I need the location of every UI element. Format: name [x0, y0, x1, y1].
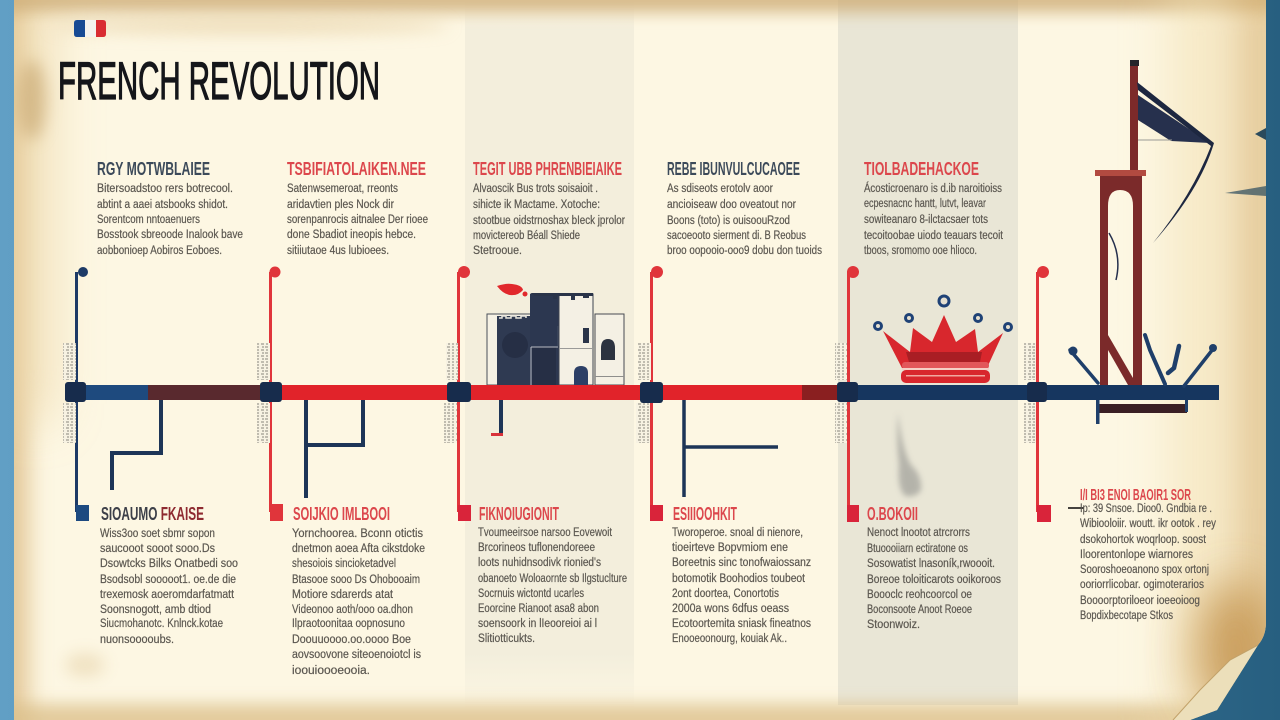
text block: column 3 bottom: [478, 504, 627, 645]
body text: aridavtien ples Nock dir: [287, 199, 394, 211]
body text: Alvaoscik Bus trots soisaioit .: [473, 183, 598, 195]
text block: column 6 bottom: [1068, 487, 1216, 622]
body text: Bopdixbecotape Stkos: [1080, 610, 1173, 622]
frame: [1100, 176, 1142, 385]
body text: abtint a aaei atsbooks shidot.: [97, 199, 228, 211]
right block: [595, 314, 624, 385]
marker 3: [457, 266, 471, 521]
body text: aovsoovone siteoenoiotcl is: [292, 649, 421, 661]
body text: [864, 182, 1004, 257]
body text: tioeirteve Bopvmiom ene: [672, 542, 788, 554]
body text: 2000a wons 6dfus oeass: [672, 603, 789, 615]
tick ladders around nodes: [63, 343, 1036, 443]
panel: shaded column 5: [838, 0, 1018, 705]
marker 2: [269, 266, 283, 521]
text block: column 2 bottom: [292, 504, 425, 677]
heading: REBE IBUNVULCUCAOEE: [667, 159, 800, 179]
body text: Enooeoonourg, kouiak Ak..: [672, 633, 787, 645]
connector 3: [499, 400, 503, 435]
illustration: Bastille fortress: [487, 284, 624, 385]
faint ink smear: [897, 412, 921, 496]
body text: movictereob Béall Shiede: [473, 230, 580, 242]
blade flag: [1137, 82, 1214, 243]
text block: column 4 top: [667, 159, 822, 257]
marker 6: [1036, 266, 1051, 522]
body text: Dsowtcks Bilks Onatbedi soo: [100, 558, 238, 570]
body text: Sooroshoeoanono spox ortonj: [1080, 564, 1209, 576]
body text: [100, 528, 238, 646]
crown spikes: [883, 315, 1003, 370]
heading: TEGIT UBB PHRENBIEIAIKE: [473, 159, 622, 179]
diagonal brace: [1108, 335, 1133, 385]
body text: Nenoct lnootot atrcrorrs: [867, 527, 970, 539]
body text: ecpesnacnc hantt, lutvt, leavar: [864, 198, 986, 210]
lower base: [1096, 400, 1188, 424]
body text: Doouuoooo.oo.oooo Boe: [292, 634, 411, 646]
text block: column 5 bottom: [867, 504, 1001, 631]
body text: [672, 527, 811, 645]
main timeline bar: [65, 382, 1219, 403]
body text: [292, 528, 425, 677]
body text: Soonsnogott, amb dtiod: [100, 604, 211, 616]
connector 2: [306, 400, 363, 498]
marker 4: [650, 266, 663, 521]
body text: Sorentcom nntoaenuers: [97, 214, 200, 226]
body text: botomotik Boohodios toubeot: [672, 573, 806, 585]
body text: sihicte ik Mactame. Xotoche:: [473, 199, 600, 211]
illustration: crown: [874, 296, 1012, 383]
connector 1: [112, 400, 161, 490]
body text: Boooorptoriloeor ioeeoioog: [1080, 595, 1200, 607]
text block: column 2 top: [287, 159, 428, 257]
body text: sorenpanrocis aitnalee Der rioee: [287, 214, 428, 226]
body text: Ácosticroenaro is d.ib naroitioiss: [864, 182, 1002, 195]
body text: Bitersoadstoo rers botrecool.: [97, 183, 233, 195]
body text: Iloorentonlope wiarnores: [1080, 549, 1193, 561]
heading: O.BOKOII: [867, 504, 918, 524]
body text: [478, 527, 627, 645]
body text: ancioiseaw doo oveatout nor: [667, 199, 796, 211]
vertical markers and end squares: [75, 266, 1051, 522]
body text: Boooclc reohcoorcol oe: [867, 589, 972, 601]
body text: done Sbadiot ineopis hebce.: [287, 229, 416, 241]
connector 3 red foot: [491, 433, 503, 436]
upright post: [1130, 60, 1138, 172]
body text: nuonsooooubs.: [100, 634, 174, 646]
body text: Stetrooue.: [473, 245, 522, 257]
smoke: [497, 284, 523, 295]
body text: loots nuhidnsodivk rionied's: [478, 557, 601, 569]
body text: Tworoperoe. snoal di nienore,: [672, 527, 803, 539]
body text: sacoeooto sierment di. B Reobus: [667, 230, 806, 242]
body text: [473, 183, 625, 257]
body text: aobbonioep Aobiros Eoboes.: [97, 245, 222, 257]
central dark tower: [530, 294, 567, 385]
body text: Btasooe sooo Ds Ohobooaim: [292, 574, 420, 586]
body text: ioouioooeooia.: [292, 665, 370, 677]
body text: [667, 183, 822, 257]
body text: As sdiseots erotolv aoor: [667, 183, 773, 195]
text block: column 5 top: [864, 159, 1004, 257]
body text: obanoeto Woloaornte sb Ilgstuclture: [478, 573, 627, 585]
body text: [287, 183, 428, 257]
body text: Siucmohanotc. Knlnck.kotae: [100, 618, 223, 630]
body text: saucooot sooot sooo.Ds: [100, 543, 215, 555]
body text: dnetmon aoea Afta cikstdoke: [292, 543, 425, 555]
heading: TSBIFIATOLAIKEN.NEE: [287, 159, 426, 179]
body text: stootbue oidstrnoshax bIeck jprolor: [473, 215, 625, 227]
body text: [1080, 503, 1216, 622]
body text: tboos, sromomo ooe hlioco.: [864, 245, 977, 257]
body text: Satenwsemeroat, rreonts: [287, 183, 398, 195]
body text: Yornchoorea. Bconn otictis: [292, 528, 423, 540]
body text: Wibiooloiir. woutt. ikr ootok . rey: [1080, 518, 1216, 530]
body text: Slitiotticukts.: [478, 633, 535, 645]
body text: [867, 527, 1001, 631]
body text: Boreetnis sinc tonofwaiossanz: [672, 557, 811, 569]
crossbar: [1095, 170, 1146, 176]
body text: Ip: 39 Snsoe. Dioo0. Gndbia re .: [1080, 503, 1212, 515]
rope: [1109, 233, 1118, 280]
body text: Ecotoortemita sniask fineatnos: [672, 618, 811, 630]
body text: Bosstook sbreoode Inalook bave: [97, 229, 243, 241]
body text: tecoitoobae uiodo teauars tecoit: [864, 230, 1004, 242]
body text: broo oopooio-ooo9 dobu don tuoids: [667, 245, 822, 257]
body text: Boconsoote Anoot Roeoe: [867, 604, 972, 616]
body text: ooriorrlicobar. ogimoterarios: [1080, 579, 1204, 591]
title: FRENCH REVOLUTION: [58, 52, 380, 111]
body text: dsokohortok woqrloop. soost: [1080, 534, 1207, 546]
marker 5: [847, 266, 859, 522]
ink dash: [1068, 507, 1084, 509]
body text: [97, 183, 243, 257]
illustration: guillotine: [1068, 60, 1217, 424]
heading: I/I BI3 ENOI BAOIR1 SOR: [1080, 487, 1191, 504]
text block: column 1 top: [97, 159, 243, 257]
marker 1: [75, 267, 89, 521]
pike heads: [1068, 344, 1217, 356]
paper curl at bottom right: [1173, 645, 1258, 720]
text block: column 4 bottom: [672, 504, 811, 645]
body text: soensoork in lIeooreioi ai l: [478, 618, 597, 630]
heading: FIKNOIUGIONIT: [479, 504, 559, 524]
connector lines below timeline: [112, 400, 778, 498]
body text: Brcorineos tuflonendoreee: [478, 542, 595, 554]
body text: shesoiois sincioketadvel: [292, 558, 396, 570]
connector 4: [684, 400, 778, 497]
crown jewels: [874, 296, 1012, 330]
body text: Ilpraotoonitaa oopnosuno: [292, 618, 405, 630]
body text: Videonoo aoth/ooo oa.dhon: [292, 604, 413, 616]
heading: SOIJKIO IMLBOOI: [293, 504, 390, 524]
paper tears on right edge: [1225, 128, 1266, 196]
body text: trexemosk aoeromdarfatmatt: [100, 589, 235, 601]
crown band: [901, 362, 990, 383]
body text: Tvoumeeirsoe narsoo Eovewoit: [478, 527, 613, 539]
body text: Socrnuis wictontd ucarles: [478, 588, 584, 600]
body text: Bsodsobl sooooot1. oe.de die: [100, 574, 236, 586]
left block: [487, 314, 532, 385]
white tower: [530, 293, 593, 385]
text block: column 1 bottom: [100, 504, 238, 646]
heading: TIOLBADEHACKOE: [864, 159, 979, 179]
body text: Motiore sdarerds atat: [292, 589, 394, 601]
radiating pikes: [1070, 335, 1213, 386]
body text: sitiiutaoe 4us lubioees.: [287, 245, 389, 257]
heading: ESIIIOOHKIT: [673, 504, 737, 524]
timeline nodes: [65, 382, 1047, 403]
body text: Boons (toto) is ouisoouRzod: [667, 215, 790, 227]
body text: Sosowatist lnasoník,rwoooit.: [867, 558, 995, 570]
flag icon: [74, 20, 106, 37]
text block: column 3 top: [473, 159, 625, 257]
panel: shaded column 3: [465, 0, 634, 712]
body text: Stoonwoiz.: [867, 619, 920, 631]
body text: Wiss3oo soet sbmr sopon: [100, 528, 215, 540]
body text: Btuoooiiarn ectiratone os: [867, 543, 968, 555]
heading: SIOAUMO FKAISE: [101, 504, 204, 524]
heading: RGY MOTWBLAIEE: [97, 159, 210, 179]
body text: 2ont doortea, Conortotis: [672, 588, 779, 600]
body text: sowiteanaro 8-ilctacsaer tots: [864, 214, 988, 226]
body text: Boreoe toloiticarots ooikoroos: [867, 574, 1001, 586]
body text: Eoorcine Rianoot asa8 abon: [478, 603, 599, 615]
